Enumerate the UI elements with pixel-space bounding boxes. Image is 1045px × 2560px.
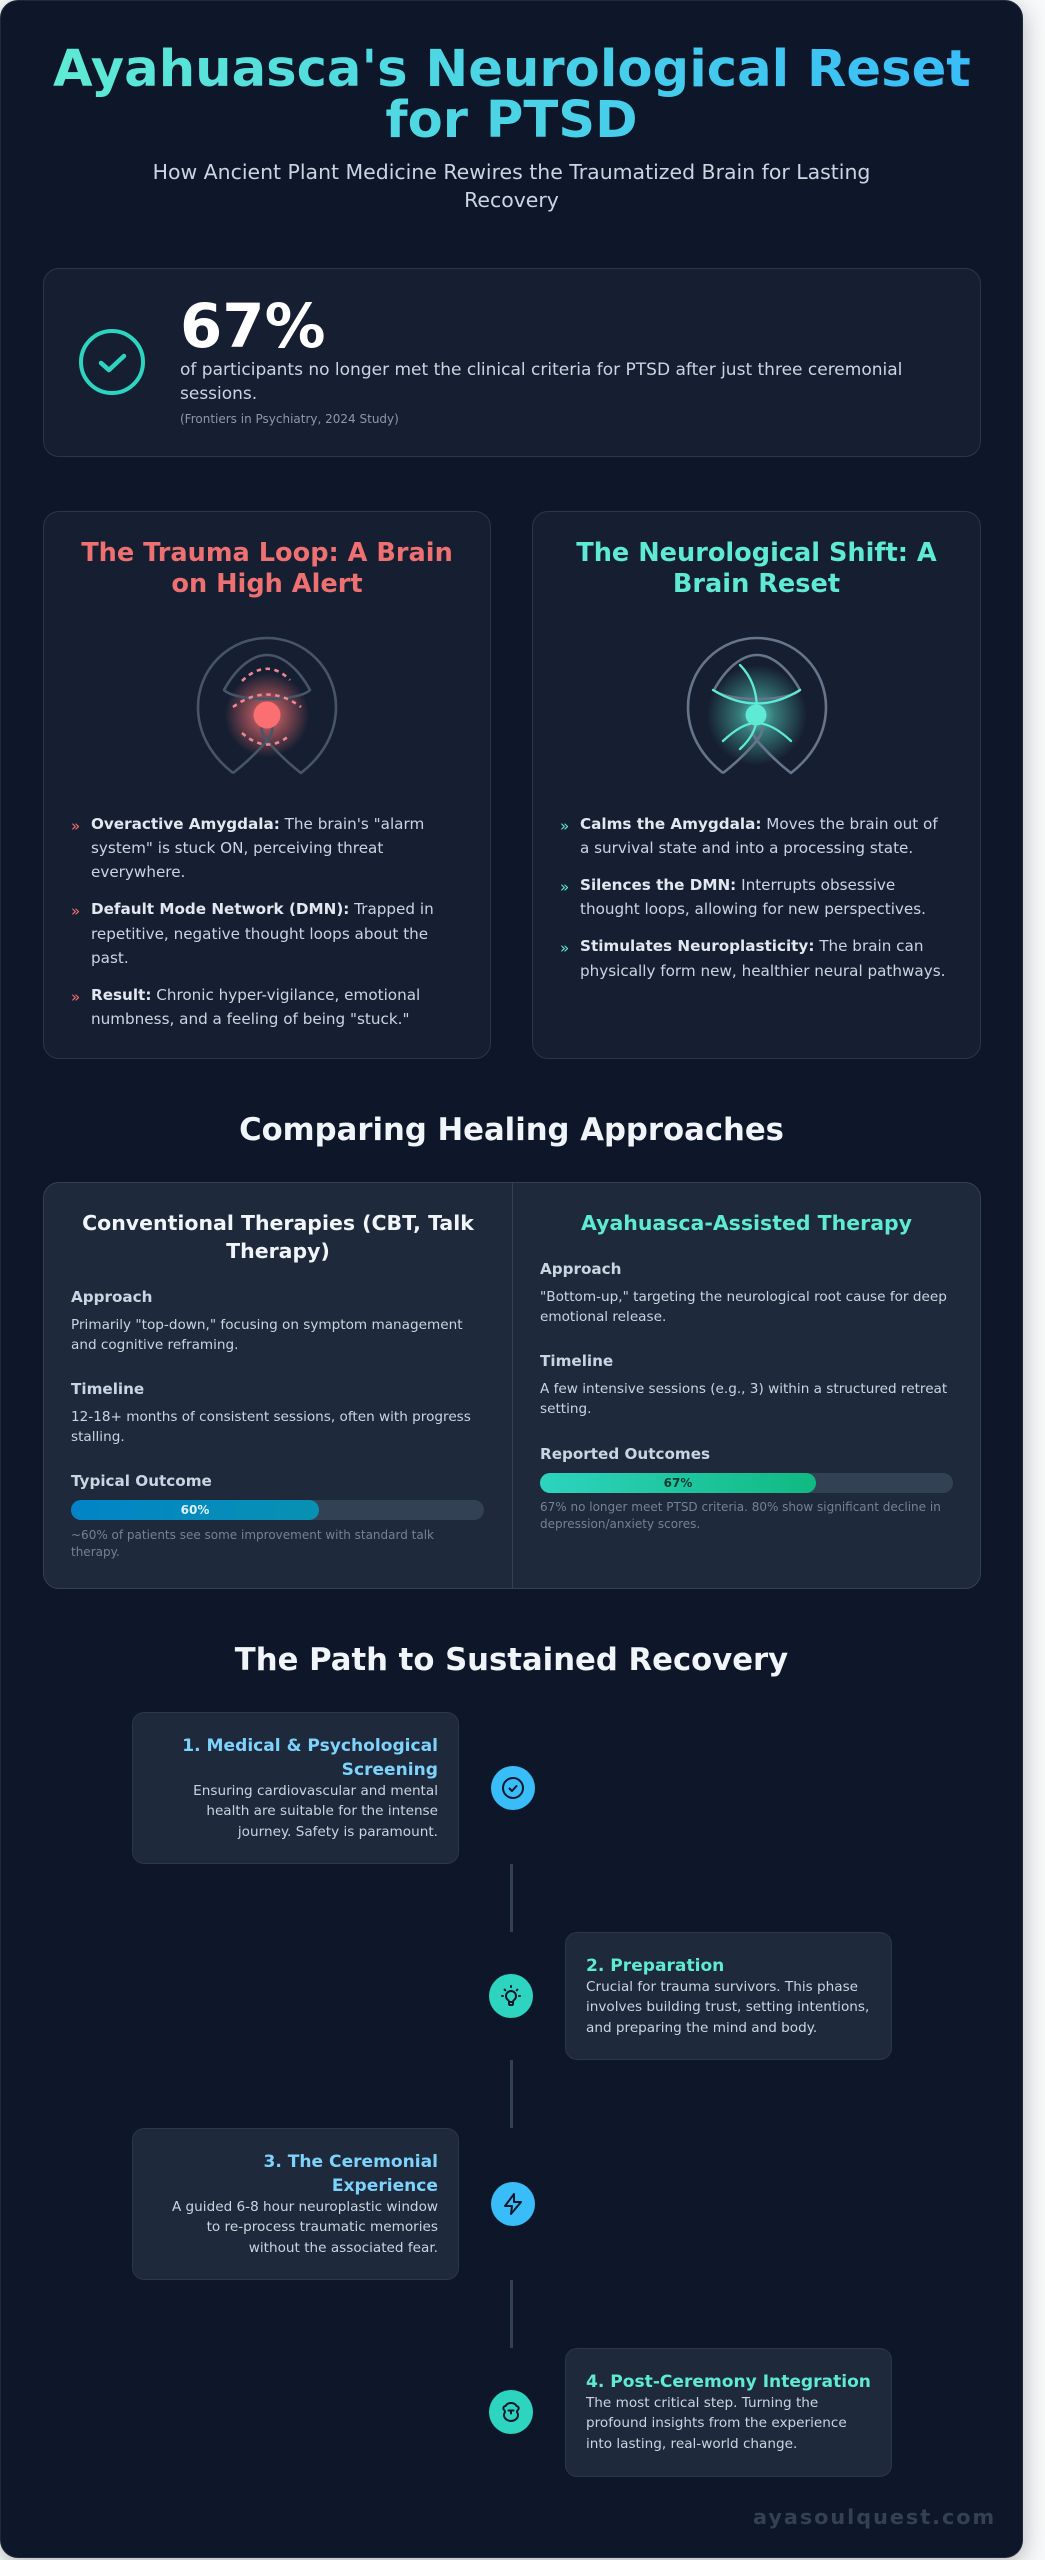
title: Ayahuasca's Neurological Reset [53, 39, 971, 99]
outcome note: ~60% of patients see some improvement with standard talk [71, 1528, 434, 1542]
step 4 card [565, 2348, 892, 2477]
bullet list: reset effects: Calms the Amygdala: Moves the brain out of [580, 814, 938, 832]
step 3 title: Experience [332, 2176, 438, 2196]
bullet list: trauma effects: system" is stuck ON, perceiving threat [91, 839, 383, 857]
bullet list: reset effects: » [560, 939, 569, 957]
bullet list: reset effects: physically form new, healthier neural pathways. [580, 962, 945, 980]
timeline: A few intensive sessions (e.g., 3) within a structured retreat [540, 1381, 947, 1397]
panel: the trauma loop [43, 511, 491, 1059]
step 2 text: Crucial for trauma survivors. This phase [586, 1979, 858, 1995]
icon: check circle [79, 329, 145, 395]
section heading: comparing healing approaches: Comparing Healing Approaches [239, 1113, 784, 1148]
heading: neurological shift: The Neurological Shift: A [576, 538, 937, 568]
step 2 text: involves building trust, setting intentions, [586, 1999, 869, 2015]
column title [82, 1211, 474, 1262]
reported outcomes [540, 1445, 953, 1531]
icon: step 2 lightbulb [489, 1974, 533, 2018]
approach: and cognitive reframing. [71, 1337, 238, 1353]
outcome note [71, 1528, 434, 1559]
bullet: result [71, 986, 420, 1028]
bullet list: reset effects: » [560, 878, 569, 896]
subtitle: How Ancient Plant Medicine Rewires the Traumatized Brain for Lasting [153, 160, 870, 184]
timeline: Timeline [540, 1352, 613, 1370]
step 2 text: and preparing the mind and body. [586, 2020, 817, 2036]
step 3 text: A guided 6-8 hour neuroplastic window [172, 2199, 438, 2215]
column divider [512, 1183, 513, 1588]
typical outcome: Typical Outcome [71, 1472, 212, 1490]
heading: neurological shift [576, 538, 937, 599]
approach: emotional release. [540, 1309, 666, 1325]
column: conventional therapies [71, 1211, 484, 1559]
step 3 text [172, 2199, 438, 2256]
timeline: stalling. [71, 1429, 125, 1445]
step 1 card [132, 1712, 459, 1864]
step 1 text: health are suitable for the intense [206, 1803, 438, 1819]
approach: Approach [71, 1288, 152, 1306]
outcome note: depression/anxiety scores. [540, 1517, 700, 1531]
approach [71, 1288, 463, 1353]
timeline [71, 1380, 471, 1445]
bullet: calms amygdala [560, 814, 938, 857]
section heading: path to sustained recovery: The Path to Sustained Recovery [235, 1643, 788, 1678]
step 3 text: to re-process traumatic memories [207, 2219, 438, 2235]
bullet: stimulates neuroplasticity [560, 937, 945, 980]
outcome note [540, 1500, 941, 1531]
icon: brain on high alert [196, 636, 338, 774]
heading: trauma loop [81, 538, 453, 599]
timeline: setting. [540, 1401, 591, 1417]
progress bar 67% [540, 1473, 953, 1493]
icon: step 3 lightning bolt [491, 2182, 535, 2226]
timeline: 12-18+ months of consistent sessions, often with progress [71, 1409, 471, 1425]
bullet list: trauma effects: Default Mode Network (DMN): Trapped in [91, 900, 434, 918]
bullet: overactive amygdala [71, 814, 424, 881]
column title: Conventional Therapies (CBT, Talk [82, 1211, 474, 1235]
bullet: default mode network [71, 900, 434, 967]
bullet list: trauma effects: Result: Chronic hyper-vigilance, emotional [91, 986, 420, 1004]
bullet list: reset effects [560, 814, 945, 980]
heading: trauma loop: The Trauma Loop: A Brain [81, 538, 453, 568]
timeline [540, 1352, 947, 1417]
bullet list: trauma effects: Overactive Amygdala: The brain's "alarm [91, 814, 424, 832]
heading: neurological shift: Brain Reset [673, 569, 840, 599]
title: for PTSD [385, 90, 638, 150]
step 3 card [132, 2128, 459, 2280]
bullet list: reset effects: a survival state and into a processing state. [580, 839, 913, 857]
bullet list: trauma effects: everywhere. [91, 863, 185, 881]
step 1 title [182, 1736, 438, 1780]
step 4 title: 4. Post-Ceremony Integration [586, 2372, 871, 2392]
bullet list: trauma effects: » [71, 816, 80, 834]
approach: Approach [540, 1260, 622, 1278]
bullet list: reset effects: » [560, 816, 569, 834]
bullet list: reset effects: Silences the DMN: Interrupts obsessive [580, 876, 895, 894]
column title: Ayahuasca-Assisted Therapy [581, 1211, 912, 1235]
step 1 text: Ensuring cardiovascular and mental [193, 1783, 438, 1799]
step 2 title: 2. Preparation [586, 1956, 724, 1976]
step 2 text [586, 1979, 869, 2036]
column title: Therapy) [226, 1238, 330, 1262]
bullet list: trauma effects [71, 814, 434, 1028]
step 4 text: into lasting, real-world change. [586, 2436, 797, 2452]
bullet list: trauma effects: repetitive, negative thought loops about the [91, 925, 428, 943]
step 3 title [263, 2152, 438, 2196]
bullet list: trauma effects: numbness, and a feeling of being "stuck." [91, 1010, 409, 1028]
subtitle: Recovery [464, 188, 559, 212]
statistic description [180, 360, 902, 404]
bullet: silences dmn [560, 876, 926, 918]
statistic description: sessions. [180, 384, 257, 404]
step 2 card [565, 1932, 892, 2060]
progress bar 67%: 67% [664, 1476, 692, 1490]
title [53, 44, 970, 146]
typical outcome [71, 1472, 484, 1559]
big number 67%: 67% [180, 292, 326, 362]
progress bar 60% [71, 1500, 484, 1520]
bullet list: trauma effects: past. [91, 949, 129, 967]
step 4 text: The most critical step. Turning the [586, 2395, 818, 2411]
citation: (Frontiers in Psychiatry, 2024 Study) [180, 412, 399, 426]
step 1 title: 1. Medical & Psychological [182, 1736, 438, 1756]
approach: Primarily "top-down," focusing on symptom management [71, 1317, 463, 1333]
step 3 title: 3. The Ceremonial [263, 2152, 438, 2172]
subtitle [153, 160, 870, 212]
heading: trauma loop: on High Alert [171, 569, 363, 599]
step 1 text [193, 1783, 438, 1840]
step 4 text: profound insights from the experience [586, 2415, 847, 2431]
footer brand: ayasoulquest.com [753, 2505, 996, 2529]
column: ayahuasca-assisted therapy [540, 1211, 953, 1531]
step 4 text [586, 2395, 847, 2452]
outcome note: 67% no longer meet PTSD criteria. 80% show significant decline in [540, 1500, 941, 1514]
icon: step 1 check [491, 1766, 535, 1810]
panel: key statistic [43, 268, 981, 457]
bullet list: trauma effects: » [71, 902, 80, 920]
reported outcomes: Reported Outcomes [540, 1445, 710, 1463]
icon: step 4 brain [489, 2390, 533, 2434]
statistic description: of participants no longer met the clinical criteria for PTSD after just three ceremonial [180, 360, 902, 380]
approach [540, 1260, 947, 1325]
bullet list: reset effects: Stimulates Neuroplasticity: The brain can [580, 937, 923, 955]
timeline: Timeline [71, 1380, 144, 1398]
outcome note: therapy. [71, 1545, 120, 1559]
progress bar 60%: 60% [181, 1503, 209, 1517]
panel: the neurological shift [532, 511, 981, 1059]
bullet list: trauma effects: » [71, 988, 80, 1006]
bullet list: reset effects: thought loops, allowing for new perspectives. [580, 900, 926, 918]
step 1 title: Screening [342, 1760, 438, 1780]
step 1 text: journey. Safety is paramount. [238, 1824, 438, 1840]
panel: comparison table [43, 1182, 981, 1589]
step 3 text: without the associated fear. [249, 2240, 438, 2256]
icon: brain reset [686, 636, 828, 774]
approach: "Bottom-up," targeting the neurological root cause for deep [540, 1289, 947, 1305]
